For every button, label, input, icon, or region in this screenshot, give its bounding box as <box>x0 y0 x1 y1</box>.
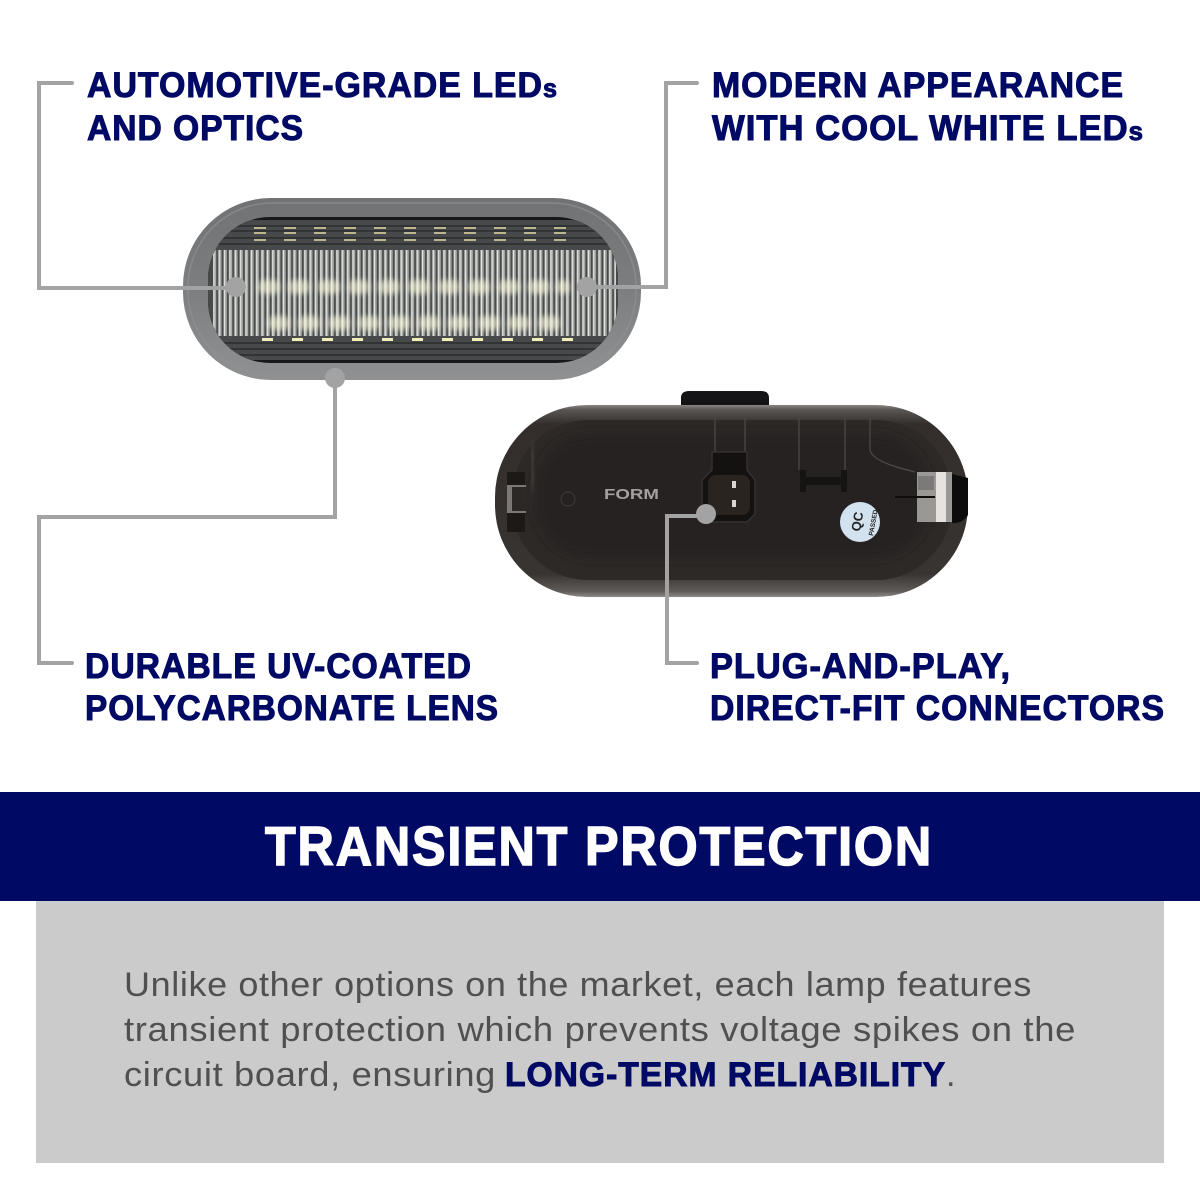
description text: transient protection which prevents voltage spikes on the <box>124 1011 1076 1049</box>
callout: modern appearance <box>712 66 1144 148</box>
callout: plug-and-play connectors <box>710 647 1165 728</box>
LED rows <box>258 280 570 330</box>
description text: . <box>946 1056 956 1094</box>
callout: plug-and-play connectors: DIRECT-FIT CONNECTORS <box>710 689 1165 728</box>
QC sticker <box>840 502 880 542</box>
callout: modern appearance: WITH COOL WHITE LEDs <box>712 109 1144 148</box>
QC sticker: QC <box>848 510 866 533</box>
callout: plug-and-play connectors: PLUG-AND-PLAY, <box>710 647 1011 686</box>
callout: automotive-grade LEDs <box>87 66 558 148</box>
connector leader line <box>667 516 706 663</box>
description text: LONG-TERM RELIABILITY <box>505 1056 946 1094</box>
FORM logo: FORM <box>604 486 659 503</box>
description text <box>124 966 1076 1094</box>
description text: circuit board, ensuring <box>124 1056 496 1094</box>
banner <box>0 792 1200 901</box>
banner heading: TRANSIENT PROTECTION <box>265 815 933 877</box>
side clip <box>800 470 847 492</box>
callout dots <box>226 277 716 524</box>
callout: automotive-grade LEDs: AND OPTICS <box>87 109 304 148</box>
connector <box>702 452 755 522</box>
callout leader lines <box>39 83 697 663</box>
callout: modern appearance: MODERN APPEARANCE <box>712 66 1124 105</box>
callout: UV-coated lens: DURABLE UV-COATED <box>85 647 472 686</box>
QC sticker: PASSED <box>868 509 880 536</box>
description text: Unlike other options on the market, each lamp features <box>124 966 1032 1004</box>
callout: UV-coated lens: POLYCARBONATE LENS <box>85 689 499 728</box>
front lamp photo <box>183 198 641 380</box>
rear lamp photo <box>495 391 968 597</box>
callout: UV-coated lens <box>85 647 499 728</box>
description panel <box>36 901 1164 1163</box>
right clip <box>895 472 968 523</box>
left clip <box>507 472 526 532</box>
callout: automotive-grade LEDs: AUTOMOTIVE-GRADE LEDs <box>87 66 558 105</box>
